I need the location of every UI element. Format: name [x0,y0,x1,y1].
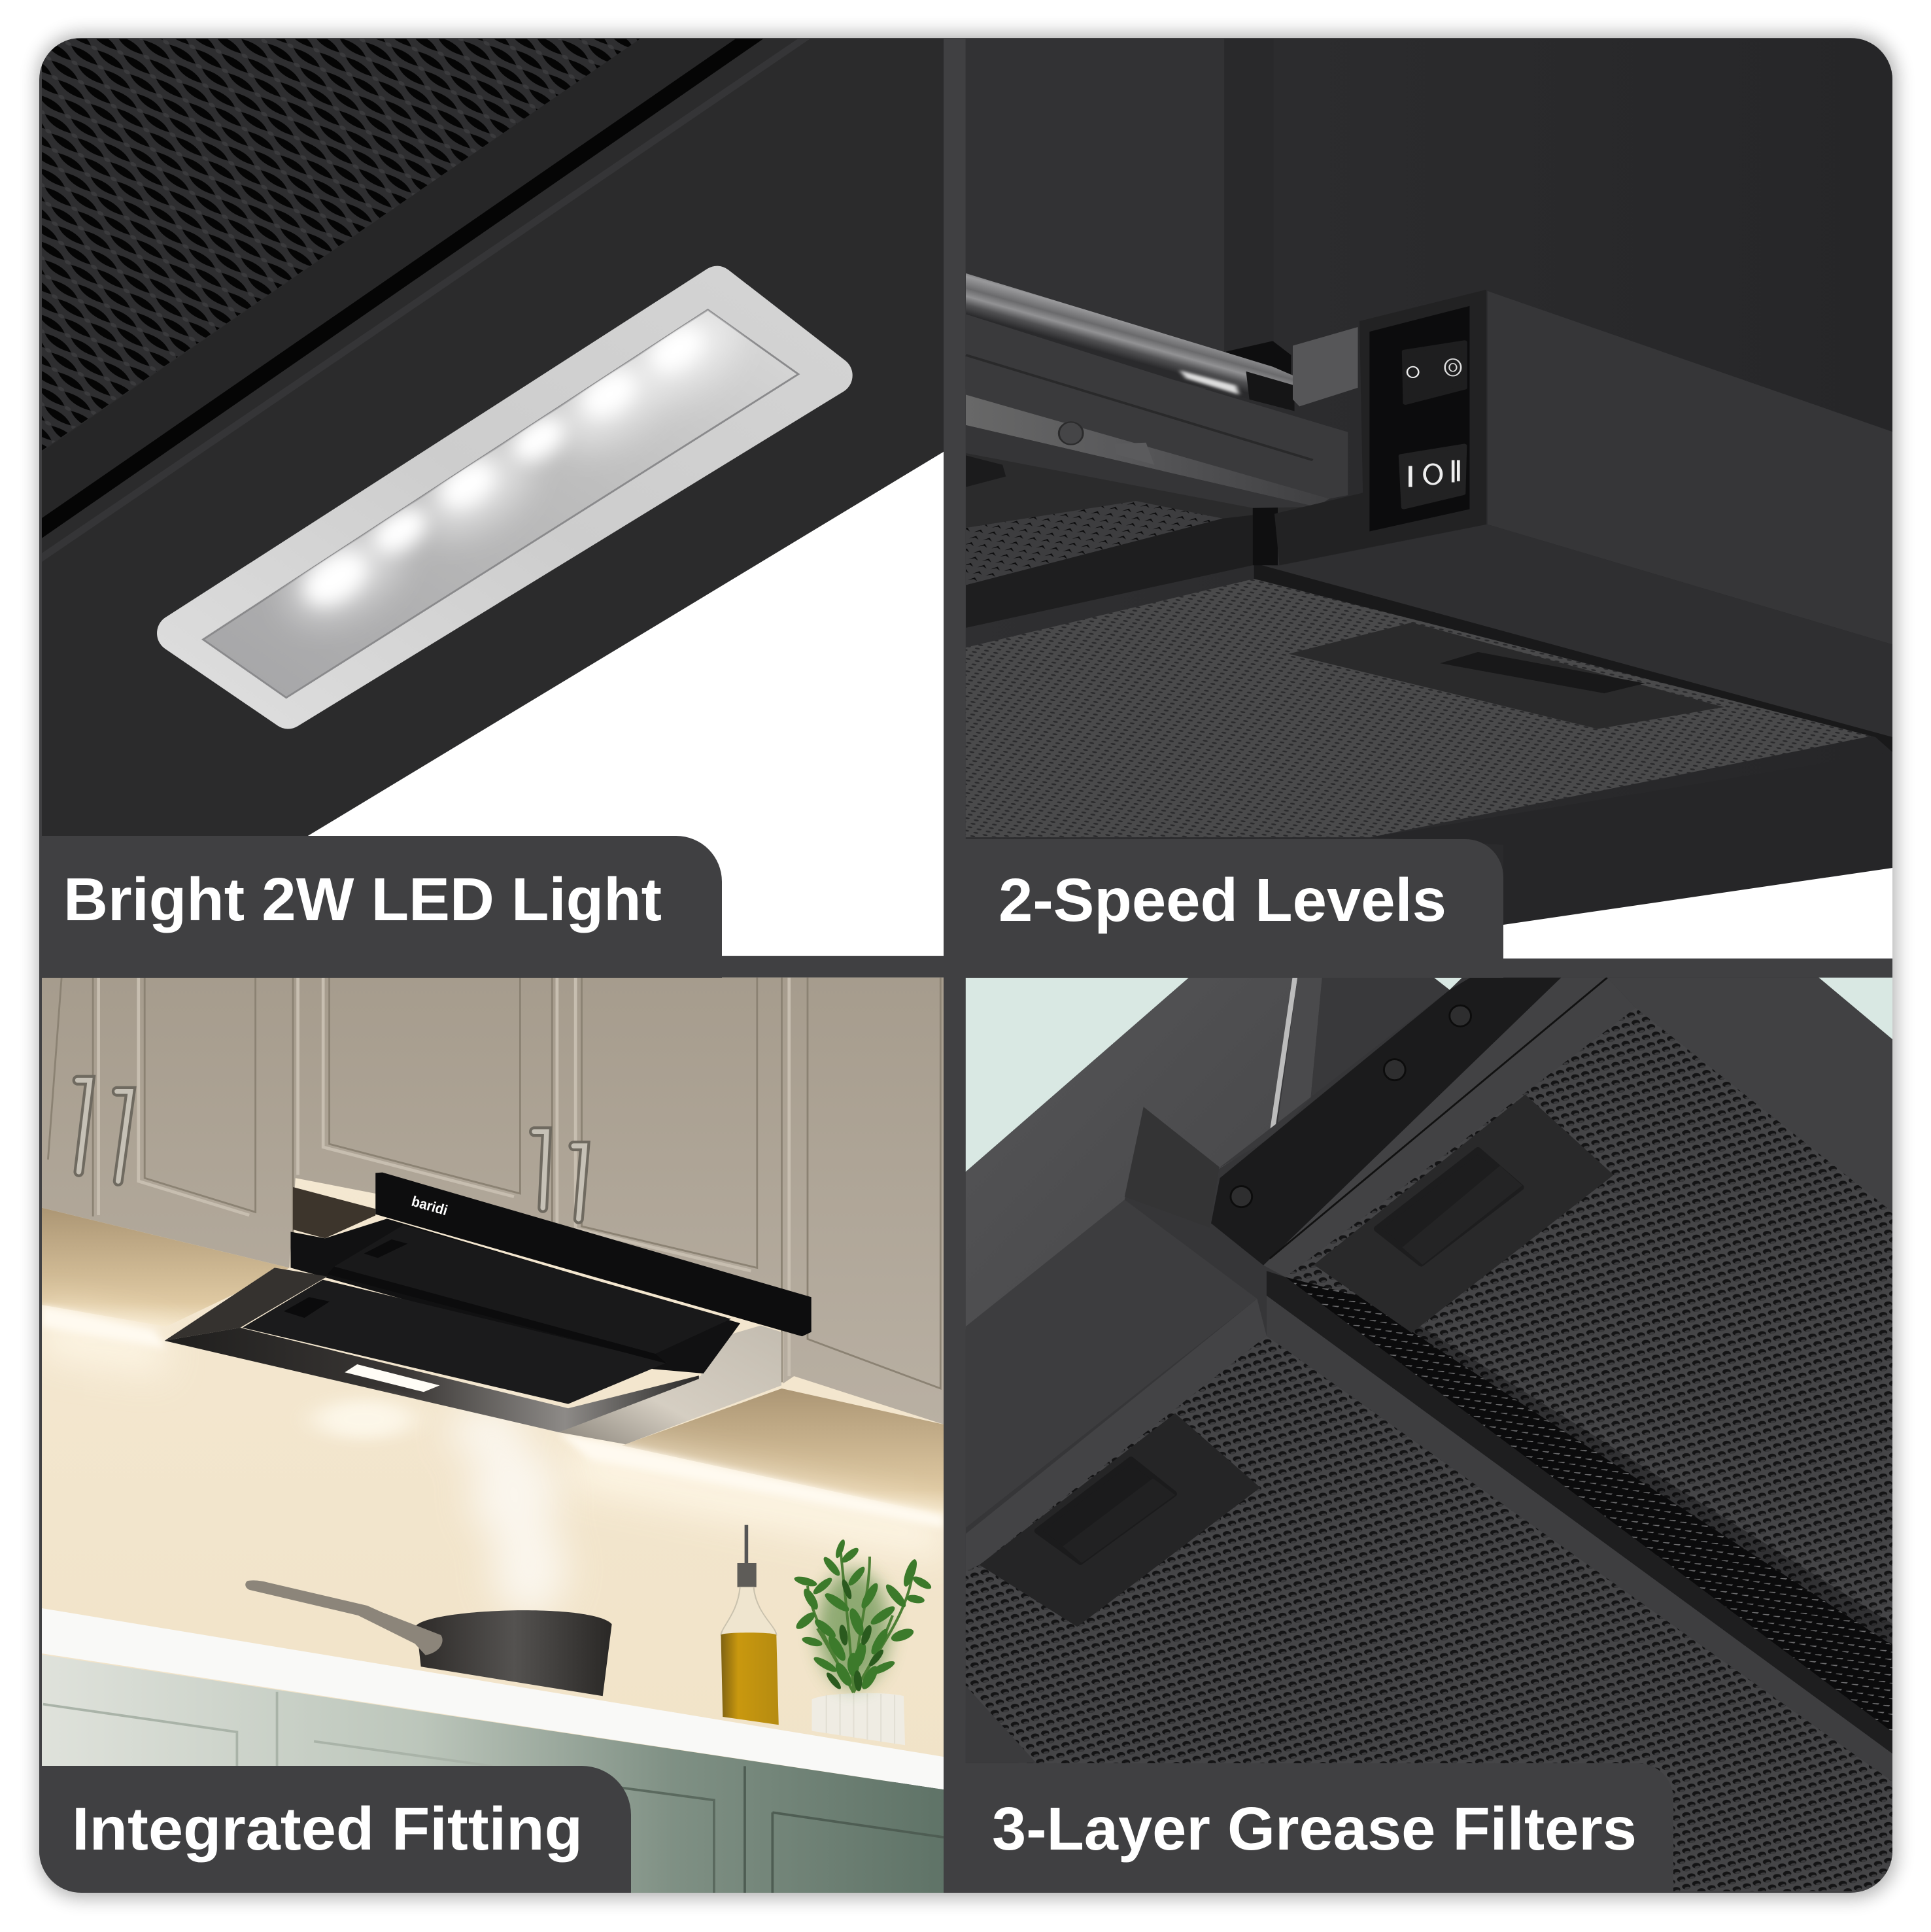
label: 3-Layer Grease Filters [944,1763,1673,1891]
plant pot [812,1693,905,1745]
recess bracket [293,1187,375,1238]
dark area below rail [966,425,1348,528]
wall vertical band [1224,39,1274,352]
LED glow spots [275,290,753,636]
door highlights [99,978,789,1376]
upper handle plate [1314,1094,1614,1333]
lower left frame [966,1685,1036,1763]
top rocker switch [1405,342,1465,403]
frame line [1270,978,1607,1258]
panel: speed levels [966,39,1892,959]
upper handle grip [1377,1150,1521,1264]
silver lower rail [966,395,1329,507]
lower rail underside [966,425,1316,508]
steel flap [1125,1107,1220,1228]
mint background left [966,978,1189,1172]
lower door lines [43,1692,944,1893]
glow wash left [42,1308,166,1376]
black rail [1211,978,1562,1266]
cabinet door lines [48,978,940,1389]
rear filter mesh [966,501,1223,585]
rear hood wall [1218,978,1450,1169]
upper hood face [966,978,1295,1330]
upper filter mesh [1286,1008,1892,1732]
steam [449,1407,566,1617]
panel: LED light [42,39,944,956]
LED lens [203,310,798,698]
screw [1059,422,1083,445]
plant [793,1538,933,1693]
light strip right [557,1432,944,1528]
hood bottom edge [1254,525,1892,737]
black opening [966,455,1006,487]
filter mesh front [966,579,1875,837]
rail dark tip [1246,371,1295,411]
wall [42,978,944,1782]
LED light [345,1364,439,1392]
grease filter mesh [42,39,640,451]
rail body [966,314,1348,498]
LED glow [314,1400,415,1439]
lower handle bar [1063,1478,1175,1563]
label: Integrated Fitting: Integrated Fitting [72,1795,583,1863]
front lower bar [1371,752,1892,925]
centre divider frame [1267,1296,1892,1782]
hood [165,1173,812,1444]
lower cabinet fronts [42,1655,944,1893]
counter top [42,1608,944,1789]
counter objects [245,1525,905,1745]
front control bar [375,1173,812,1336]
rear filter frame [966,515,1253,628]
oil bottle [721,1525,779,1725]
under-cabinet shade right [622,1389,944,1515]
upper filter frame [1263,978,1635,1277]
mint background top [1434,978,1462,990]
label: Integrated Fitting [39,1766,631,1897]
darker mesh band [1286,1277,1892,1732]
textured strip [1276,978,1322,1135]
black notch behind rail [1226,341,1291,392]
filter handle grip [1440,652,1645,693]
mint background right [1819,978,1892,1039]
cabinet handle shadows [78,1080,585,1219]
label: Bright 2W LED Light [39,836,722,978]
glow wash right [572,1438,944,1562]
white background [1503,868,1892,959]
light strip left [42,1305,166,1349]
rail screws [1231,1005,1471,1207]
hood box top [966,1199,1257,1528]
front frame [1274,290,1486,565]
filter handle plate [1289,623,1724,729]
frame highlight [42,39,810,562]
lower filter mesh [966,1336,1892,1891]
filter clips [284,1239,407,1318]
cabinet handles [78,1080,585,1219]
mesh shade transition [1286,1277,1892,1732]
black core [290,1218,740,1373]
tray front [165,1328,699,1432]
LED bezel [175,285,834,710]
logo: baridi [410,1193,449,1218]
steel edge [1270,978,1297,1131]
panel: integrated fitting [42,978,944,1893]
front filter [243,1280,667,1404]
lower handle plate [980,1413,1260,1627]
chrome rail [966,273,1295,411]
box lower strip [966,1299,1267,1571]
label: 3-Layer Grease Filters: 3-Layer Grease Filters [992,1795,1637,1863]
label: 2-Speed Levels [944,839,1503,978]
steel bracket [1293,327,1358,406]
wall left section [966,39,1224,389]
rail body line [966,355,1313,460]
label: Bright 2W LED Light: Bright 2W LED Light [63,865,662,933]
filter frame edge [1254,563,1892,752]
white background below hood [308,452,944,956]
chrome highlight [1180,370,1239,395]
under-cabinet shade left [42,1208,289,1326]
pan [245,1580,612,1696]
filter divider [328,1267,667,1364]
tray left side [165,1268,328,1341]
hood right side [1488,291,1892,644]
rail tab [1114,443,1154,465]
outer frame top right [1607,978,1892,1215]
rear filter [334,1225,731,1354]
cabinets upper [42,978,944,1424]
switch recess [1369,306,1469,531]
panel: grease filters [966,978,1892,1891]
frame joint [1253,507,1278,565]
bottom rocker switch [1401,445,1464,508]
black slot [42,39,763,538]
upper handle bar [1402,1165,1522,1265]
lower handle grip [1038,1460,1174,1562]
centre divider shadow [1267,1271,1892,1753]
steel side panel [559,1326,781,1444]
label: 2-Speed Levels: 2-Speed Levels [999,866,1446,934]
filter frame [42,39,736,519]
rail and control switches [966,273,1486,628]
